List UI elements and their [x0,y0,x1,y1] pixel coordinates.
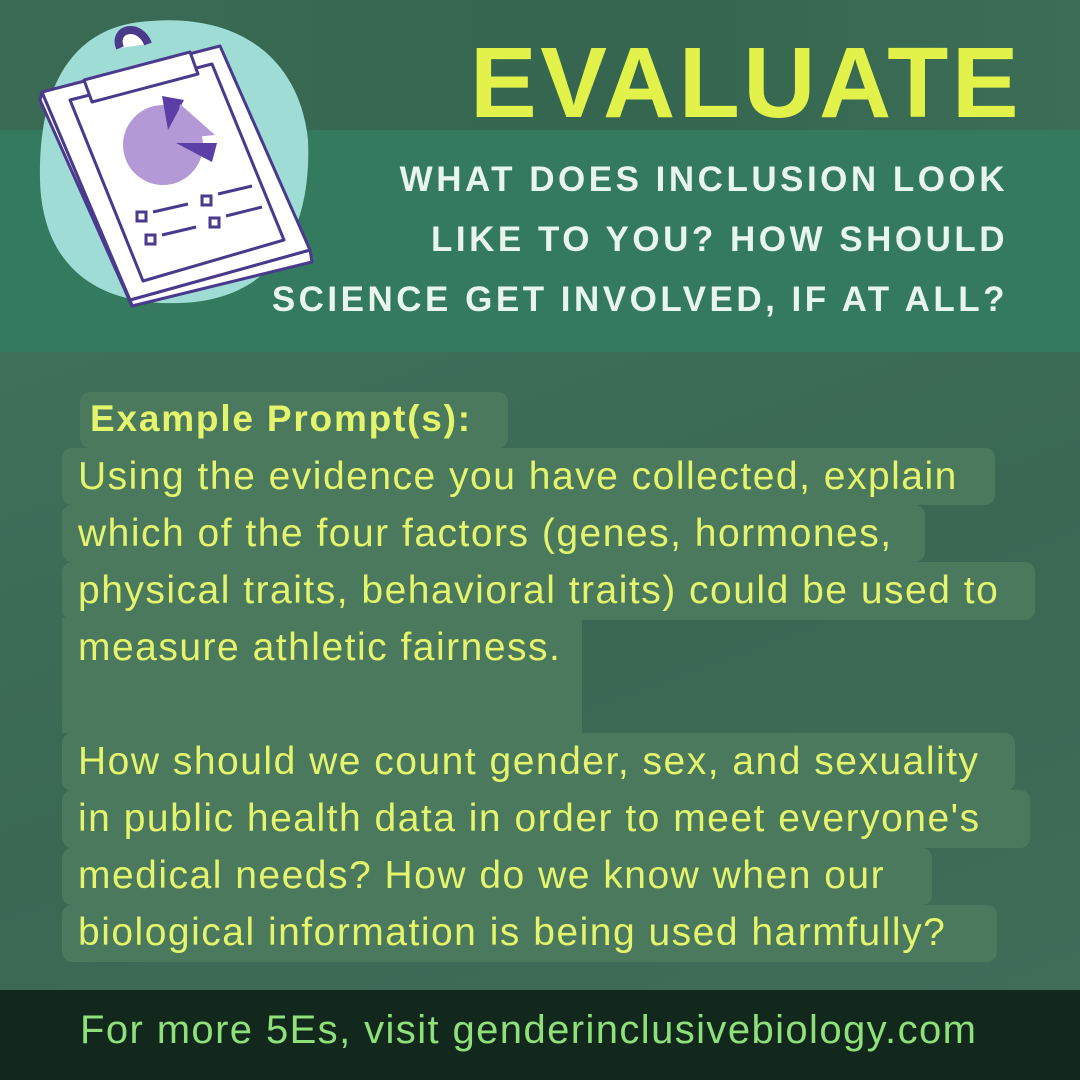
prompt text: biological information is being used harmfully? [78,911,946,954]
prompt text: measure athletic fairness. [78,626,561,669]
prompt text: physical traits, behavioral traits) could be used to [78,569,999,612]
subtitle: SCIENCE GET INVOLVED, IF AT ALL? [272,280,1008,319]
prompt text [78,455,999,954]
prompt text: How should we count gender, sex, and sexuality [78,740,980,783]
text highlight boxes [62,392,1035,962]
header band [0,130,1080,352]
footer: For more 5Es, visit genderinclusivebiology.com [80,1008,977,1052]
prompt text: in public health data in order to meet everyone's [78,797,981,840]
subtitle: WHAT DOES INCLUSION LOOK [400,160,1008,199]
footer [0,990,1080,1080]
prompt text: Using the evidence you have collected, explain [78,455,958,498]
prompt text: medical needs? How do we know when our [78,854,885,897]
prompt text: which of the four factors (genes, hormones, [78,512,893,555]
title: EVALUATE [470,27,1022,139]
prompts heading: Example Prompt(s): [90,398,472,439]
subtitle [272,160,1008,319]
icon: clipboard [38,20,314,308]
subtitle: LIKE TO YOU? HOW SHOULD [431,220,1008,259]
